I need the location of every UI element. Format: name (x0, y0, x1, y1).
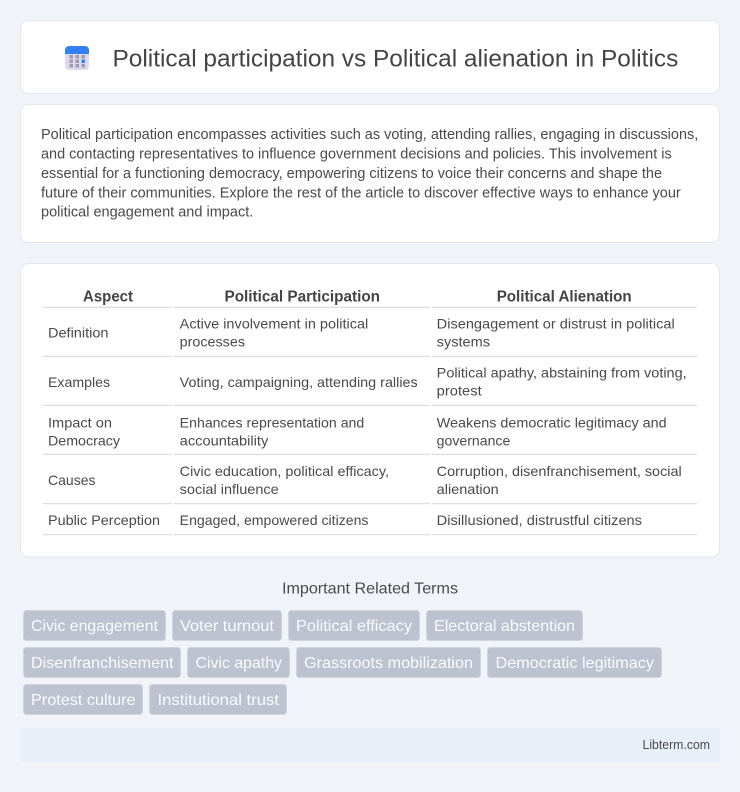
table row: public perception: Disillusioned, distrustful citizens (437, 512, 642, 528)
icon: calendar (65, 46, 89, 70)
footer credit: Libterm.com (642, 738, 710, 752)
table header row: Aspect (83, 289, 133, 306)
tag group: related terms: Electoral abstention (434, 618, 575, 635)
text block: introduction paragraph: future of their communities. Explore the rest of the article to discover effective ways to enhance your (41, 185, 681, 201)
heading: important related terms: Important Related Terms (282, 580, 458, 597)
table row: impact on democracy: Impact on (48, 414, 112, 430)
table row: examples (48, 365, 687, 399)
table row: causes: alienation (437, 481, 499, 497)
text block: introduction paragraph: essential for a functioning democracy, empowering citizens to voice their concerns and shape the (41, 166, 662, 182)
table row: definition: Active involvement in political (180, 316, 368, 332)
text block: introduction paragraph: and contacting representatives to influence government decisions and policies. This involvement is (41, 146, 672, 162)
table header row: Political Alienation (497, 289, 632, 306)
table row: impact on democracy: Democracy (48, 432, 120, 448)
tag group: related terms: Political efficacy (296, 618, 412, 635)
table header row (83, 289, 632, 306)
table row: causes: social influence (180, 481, 279, 497)
tag group: related terms (24, 610, 662, 714)
panel: introduction (20, 104, 720, 242)
table row: impact on democracy: governance (437, 432, 511, 448)
tag group: related terms: Institutional trust (158, 692, 280, 709)
table row: examples: Political apathy, abstaining from voting, (437, 365, 687, 381)
table row: public perception (48, 512, 642, 528)
table row: examples: Voting, campaigning, attending rallies (180, 374, 418, 390)
table row: public perception: Public Perception (48, 512, 160, 528)
table row: impact on democracy: Weakens democratic legitimacy and (437, 414, 667, 430)
table row: causes (48, 463, 682, 497)
panel: comparison table (20, 264, 720, 557)
tag group: related terms: Voter turnout (180, 618, 275, 635)
title: Political participation vs Political alienation in Politics (112, 46, 678, 73)
tag group: related terms: Civic apathy (196, 655, 282, 672)
tag group: related terms: Civic engagement (31, 618, 159, 635)
tag group: related terms: Protest culture (31, 692, 136, 709)
text block: introduction paragraph (41, 127, 698, 221)
tag group: related terms: Democratic legitimacy (496, 655, 654, 672)
table row: impact on democracy: accountability (180, 432, 268, 448)
table row: definition: systems (437, 334, 490, 350)
table row: public perception: Engaged, empowered citizens (180, 512, 368, 528)
table row: causes: Civic education, political efficacy, (180, 463, 389, 479)
table row: impact on democracy (48, 414, 667, 448)
table row: causes: Causes (48, 472, 96, 488)
tag group: related terms: Grassroots mobilization (304, 655, 473, 672)
table header row: Political Participation (224, 289, 380, 306)
table row: definition (48, 316, 675, 350)
table row: definition: Definition (48, 324, 108, 340)
table row: impact on democracy: Enhances representation and (180, 414, 364, 430)
tag group: related terms: Disenfranchisement (31, 655, 174, 672)
text block: introduction paragraph: political engagement and impact. (41, 205, 253, 221)
table row: definition: Disengagement or distrust in political (437, 316, 675, 332)
table row: causes: Corruption, disenfranchisement, social (437, 463, 682, 479)
footer bar (20, 728, 720, 762)
panel: title card (20, 20, 720, 94)
table row: examples: protest (437, 383, 482, 399)
table row: definition: processes (180, 334, 245, 350)
text block: introduction paragraph: Political participation encompasses activities such as voting, attending rallies, engaging in discussions, (41, 127, 698, 143)
table row: examples: Examples (48, 374, 110, 390)
